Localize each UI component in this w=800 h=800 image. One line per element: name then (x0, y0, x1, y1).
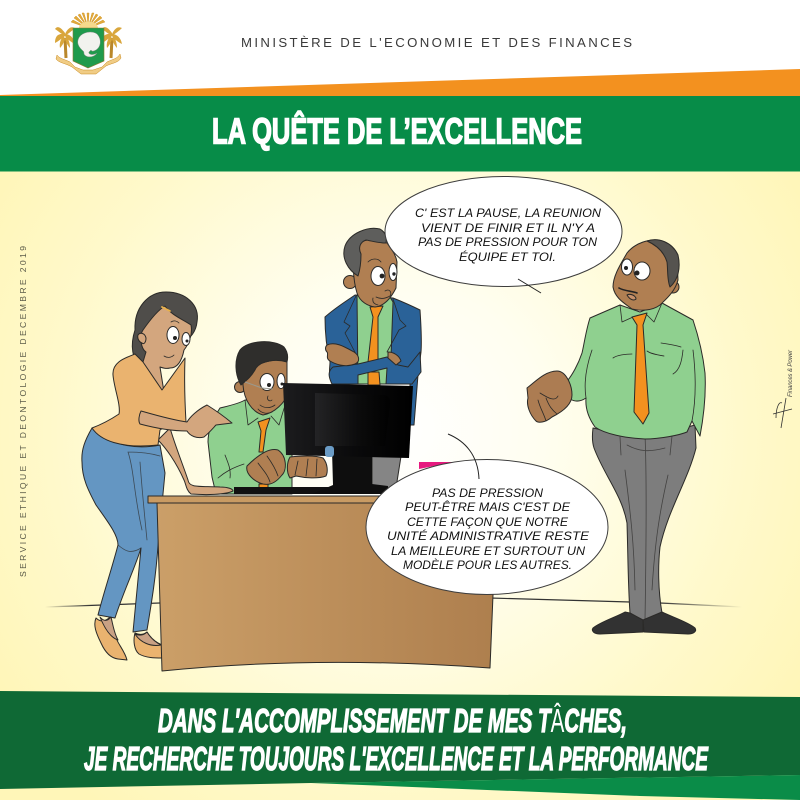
shoes (592, 612, 643, 634)
shoes (95, 617, 127, 660)
character: standing man in blue jacket (325, 228, 421, 488)
hand: right fingers (287, 456, 327, 478)
jacket (325, 295, 421, 425)
icon: coat of arms of Côte d'Ivoire (55, 13, 122, 74)
resting arm (158, 428, 233, 495)
crossed arms (329, 352, 421, 384)
ministry name: MINISTÈRE DE L'ECONOMIE ET DES FINANCES (241, 35, 632, 50)
floor line right (490, 598, 742, 607)
title banner (0, 96, 800, 172)
face (353, 239, 397, 307)
title: LA QUÊTE DE L’EXCELLENCE (212, 110, 582, 152)
hair (132, 292, 197, 366)
eyes (371, 266, 385, 286)
shirt (357, 294, 393, 384)
bubble shape (366, 460, 608, 594)
speech bubble: bottom (366, 434, 608, 594)
bubble text: LA MEILLEURE ET SURTOUT UN (391, 544, 585, 558)
pink folder (419, 462, 454, 469)
eyes (622, 259, 632, 275)
footer message (84, 702, 709, 777)
ear (344, 276, 356, 288)
header: ministry (55, 13, 632, 74)
bubble text: PEUT-ÊTRE MAIS C'EST DE (405, 499, 571, 514)
tie (368, 306, 383, 385)
shirt (208, 399, 292, 494)
hands (326, 344, 359, 366)
lighter green wedge (311, 775, 800, 800)
bubble shape (385, 176, 622, 286)
bubble text: PAS DE PRESSION (432, 486, 543, 500)
face and neck (140, 306, 191, 392)
speech bubble: top (385, 176, 622, 293)
bubble tail (448, 434, 479, 479)
character: seated man (208, 342, 292, 494)
tie (258, 418, 270, 494)
footer message: DANS L'ACCOMPLISSEMENT DE MES TÂCHES, (158, 702, 627, 739)
ear (667, 281, 679, 293)
footer banner (0, 691, 800, 800)
keyboard (234, 487, 345, 494)
bubble text: CETTE FAÇON QUE NOTRE (407, 515, 569, 529)
monitor back shell (315, 393, 390, 446)
orange diagonal wedge (0, 69, 800, 97)
blouse (92, 354, 186, 446)
cable clip (325, 446, 334, 457)
bubble text (415, 206, 601, 264)
bubble text: PAS DE PRESSION POUR TON (418, 235, 597, 249)
bubble text (387, 486, 590, 572)
artist signature (773, 349, 794, 428)
tie (632, 313, 649, 424)
trousers (592, 425, 696, 622)
face (243, 358, 287, 415)
bubble text: ÉQUIPE ET TOI. (459, 249, 556, 264)
jeans (82, 428, 165, 632)
monitor (283, 383, 413, 458)
bubble text: C' EST LA PAUSE, LA REUNION (415, 206, 601, 220)
lapels (344, 296, 406, 358)
open hand (527, 371, 572, 422)
hair (344, 228, 386, 276)
hands on keyboard and computer (234, 383, 413, 494)
bubble text: MODÈLE POUR LES AUTRES. (403, 557, 572, 572)
glasses and eyes (260, 374, 274, 390)
desk (148, 496, 493, 671)
floor line left (45, 603, 160, 607)
hair (236, 342, 288, 385)
ear (234, 382, 246, 392)
character: man with hand open (527, 240, 705, 634)
illustration background (0, 171, 800, 800)
hand: left fist (247, 449, 285, 484)
bubble text: UNITÉ ADMINISTRATIVE RESTE (387, 528, 590, 543)
character: woman pointing (82, 292, 233, 660)
side credit: SERVICE ETHIQUE ET DEONTOLOGIE DECEMBRE 2019 (18, 246, 28, 577)
monitor stand (312, 450, 388, 494)
bubble text: VIENT DE FINIR ET IL N'Y A (421, 221, 595, 235)
artist signature: Finances & Power (788, 349, 794, 397)
hair (647, 240, 679, 287)
shirt (568, 303, 705, 439)
bubble tail (518, 279, 541, 293)
grey trousers behind monitor (372, 450, 402, 488)
pointing forearm and hand (139, 405, 232, 438)
face (613, 240, 678, 310)
